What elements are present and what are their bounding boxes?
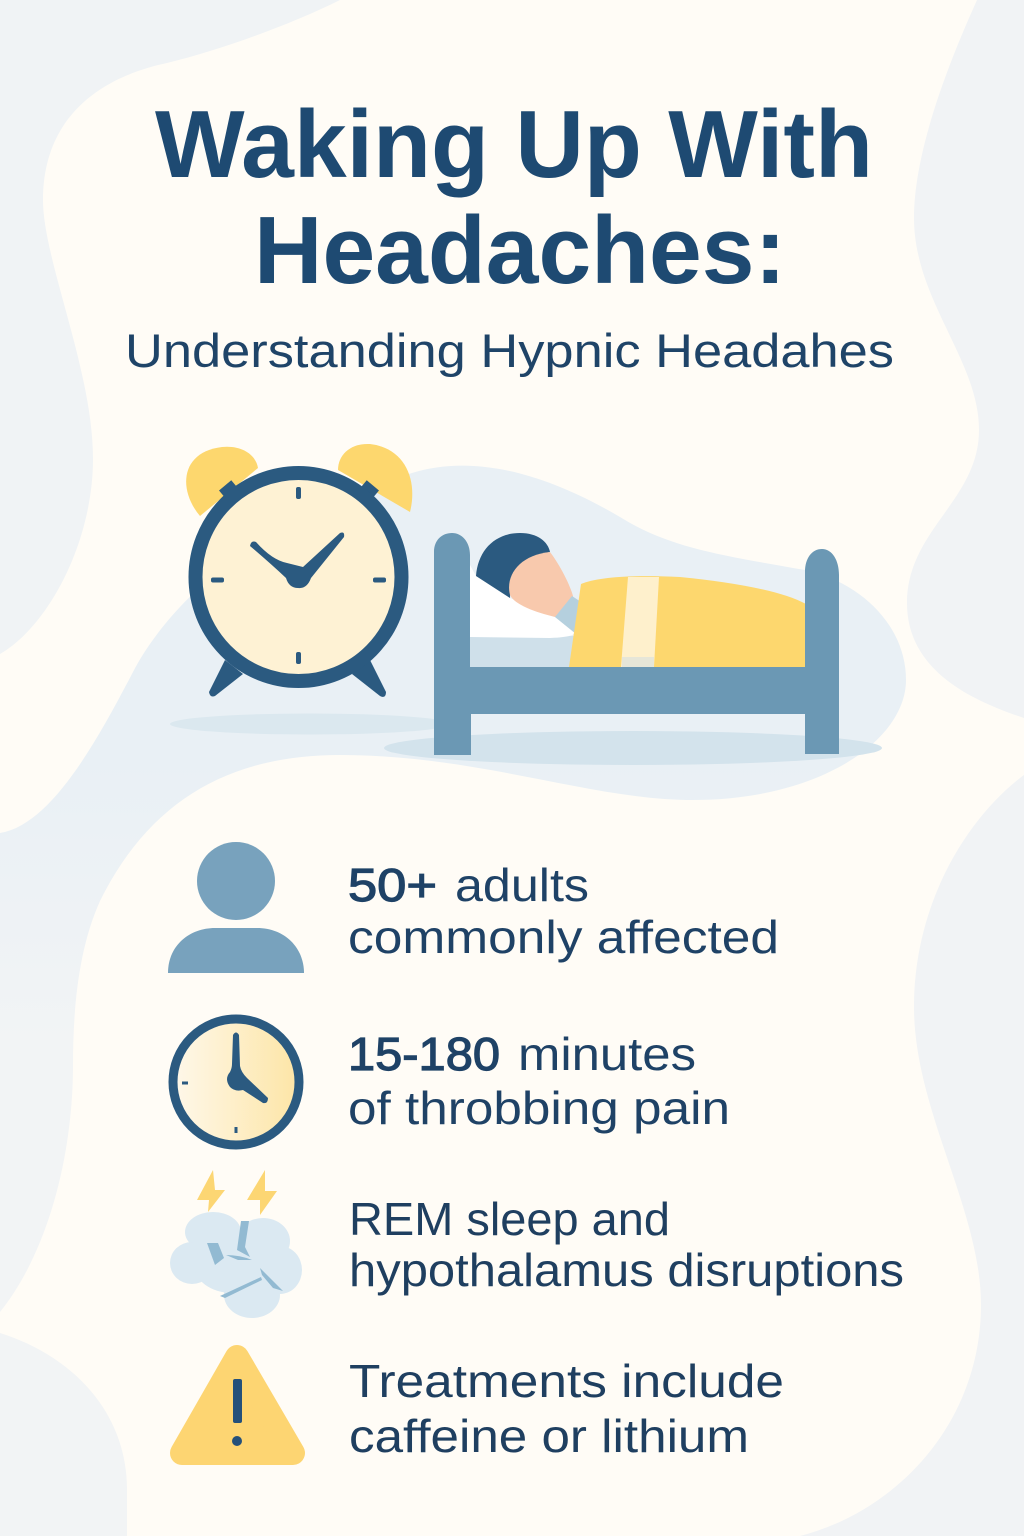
text: 15-180 minutes of throbbing pain: minutes: [518, 1028, 696, 1080]
text: 50+ adults commonly affected: 50+: [348, 859, 437, 911]
text: REM sleep and hypothalamus disruptions: REM sleep and: [349, 1193, 670, 1245]
text: REM sleep and hypothalamus disruptions: hypothalamus disruptions: [349, 1244, 904, 1296]
text: 50+ adults commonly affected: [348, 859, 779, 963]
text: 50+ adults commonly affected: adults: [455, 859, 589, 911]
title: Waking Up With: [155, 91, 873, 198]
icon: alarm clock: [186, 444, 412, 697]
text: 15-180 minutes of throbbing pain: [348, 1028, 730, 1134]
text: REM sleep and hypothalamus disruptions: [349, 1193, 904, 1296]
title: [155, 91, 873, 304]
text: treatments include caffeine or lithium: [349, 1355, 784, 1462]
text: treatments include caffeine or lithium: Treatments include: [349, 1355, 784, 1407]
subtitle: Understanding Hypnic Headahes: [125, 324, 894, 377]
icon: bed with sleeping person: [434, 533, 839, 755]
text: 50+ adults commonly affected: commonly affected: [348, 911, 779, 963]
icon: person: [168, 842, 304, 973]
text: 15-180 minutes of throbbing pain: of throbbing pain: [348, 1082, 730, 1134]
text: treatments include caffeine or lithium: caffeine or lithium: [349, 1410, 749, 1462]
icon: clock: [173, 1019, 299, 1145]
bed shadow: [384, 731, 882, 765]
row: 15-180 minutes: [173, 1019, 730, 1145]
illustration: alarm clock and person in bed: [170, 444, 882, 765]
row: REM sleep and hypothalamus disruptions: [170, 1170, 904, 1318]
icon: warning triangle: [182, 1357, 293, 1453]
row: 50+ adults: [168, 842, 779, 973]
title: Headaches:: [254, 197, 786, 304]
clock shadow: [170, 714, 450, 734]
row: treatments: [182, 1355, 784, 1462]
icon: brain with lightning bolts: [170, 1170, 302, 1318]
text: 15-180 minutes of throbbing pain: 15-180: [348, 1028, 500, 1080]
